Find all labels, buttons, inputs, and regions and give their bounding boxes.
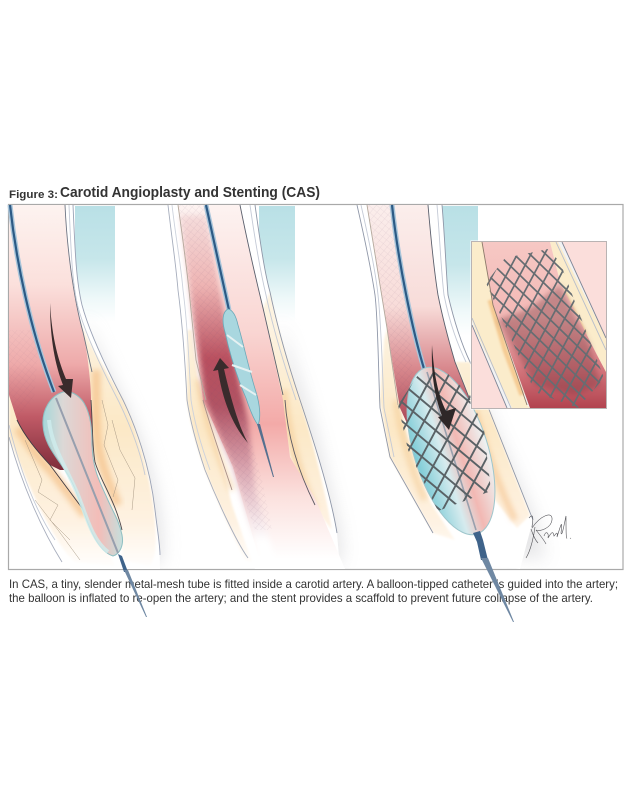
lumen, middle panel	[178, 205, 345, 569]
right plaque, middle panel	[263, 292, 332, 530]
stent mesh, right panel	[398, 372, 490, 510]
left plaque, left panel	[9, 396, 108, 556]
inset stent mesh	[486, 249, 604, 408]
right plaque, right panel	[455, 362, 530, 528]
dark lumen band, middle panel	[178, 214, 264, 544]
wall lines, right panel	[357, 205, 533, 533]
plaque veins, left panel	[25, 400, 135, 560]
artery wall, left panel	[66, 205, 160, 569]
deflated balloon, middle panel	[223, 309, 260, 425]
inset lumen	[482, 242, 606, 408]
teal backdrop, right panel	[442, 206, 478, 324]
title: Figure 3:	[9, 189, 58, 201]
artery shadow, left panel	[96, 342, 166, 563]
inset background	[472, 242, 606, 408]
needle, middle panel	[257, 424, 274, 477]
left plaque, middle panel	[187, 330, 252, 562]
wall lines, left panel	[9, 205, 160, 562]
signature	[526, 515, 571, 558]
needle tips crossing caption	[124, 558, 514, 622]
artery wall, right panel	[357, 205, 533, 569]
left plaque, right panel	[380, 328, 455, 540]
catheter, right panel	[392, 205, 425, 372]
title: Carotid Angioplasty and Stenting (CAS)	[60, 184, 320, 201]
inset plaque	[472, 242, 530, 408]
panel: balloon deflated (middle)	[168, 205, 345, 569]
panel: balloon inflation (left)	[9, 205, 161, 572]
needle, right panel	[473, 531, 488, 560]
arrow, right panel	[432, 345, 456, 430]
balloon, left panel	[43, 392, 123, 556]
catheter, middle panel	[206, 205, 229, 310]
arrow, left panel	[50, 303, 73, 398]
inset wall lines	[472, 242, 606, 408]
lumen, right panel	[367, 205, 475, 430]
wall lines, middle panel	[168, 205, 337, 558]
lumen, left panel	[9, 205, 93, 470]
arrow, middle panel	[213, 358, 248, 443]
balloon with stent, right panel	[398, 366, 496, 536]
inset artery wall	[472, 242, 606, 408]
artery shadow, right panel	[490, 410, 546, 562]
right plaque, left panel	[80, 320, 156, 566]
teal backdrop, middle panel	[259, 206, 295, 322]
inset: stent close-up	[470, 240, 607, 410]
artery shadow, middle panel	[286, 348, 346, 561]
inset dark plaque	[498, 285, 600, 395]
catheter, left panel	[10, 205, 118, 553]
panel: stent deployment (right)	[356, 204, 546, 569]
teal backdrop, left panel	[75, 206, 115, 322]
infographic: Carotid Angioplasty and Stenting figure	[8, 186, 624, 622]
caption	[9, 577, 618, 605]
needle, left panel	[118, 554, 128, 572]
illustration frame	[8, 204, 623, 570]
artery wall, middle panel	[168, 205, 340, 569]
caption: the balloon is inflated to re-open the artery; and the stent provides a scaffold to prevent future collapse of the artery.	[9, 591, 593, 605]
